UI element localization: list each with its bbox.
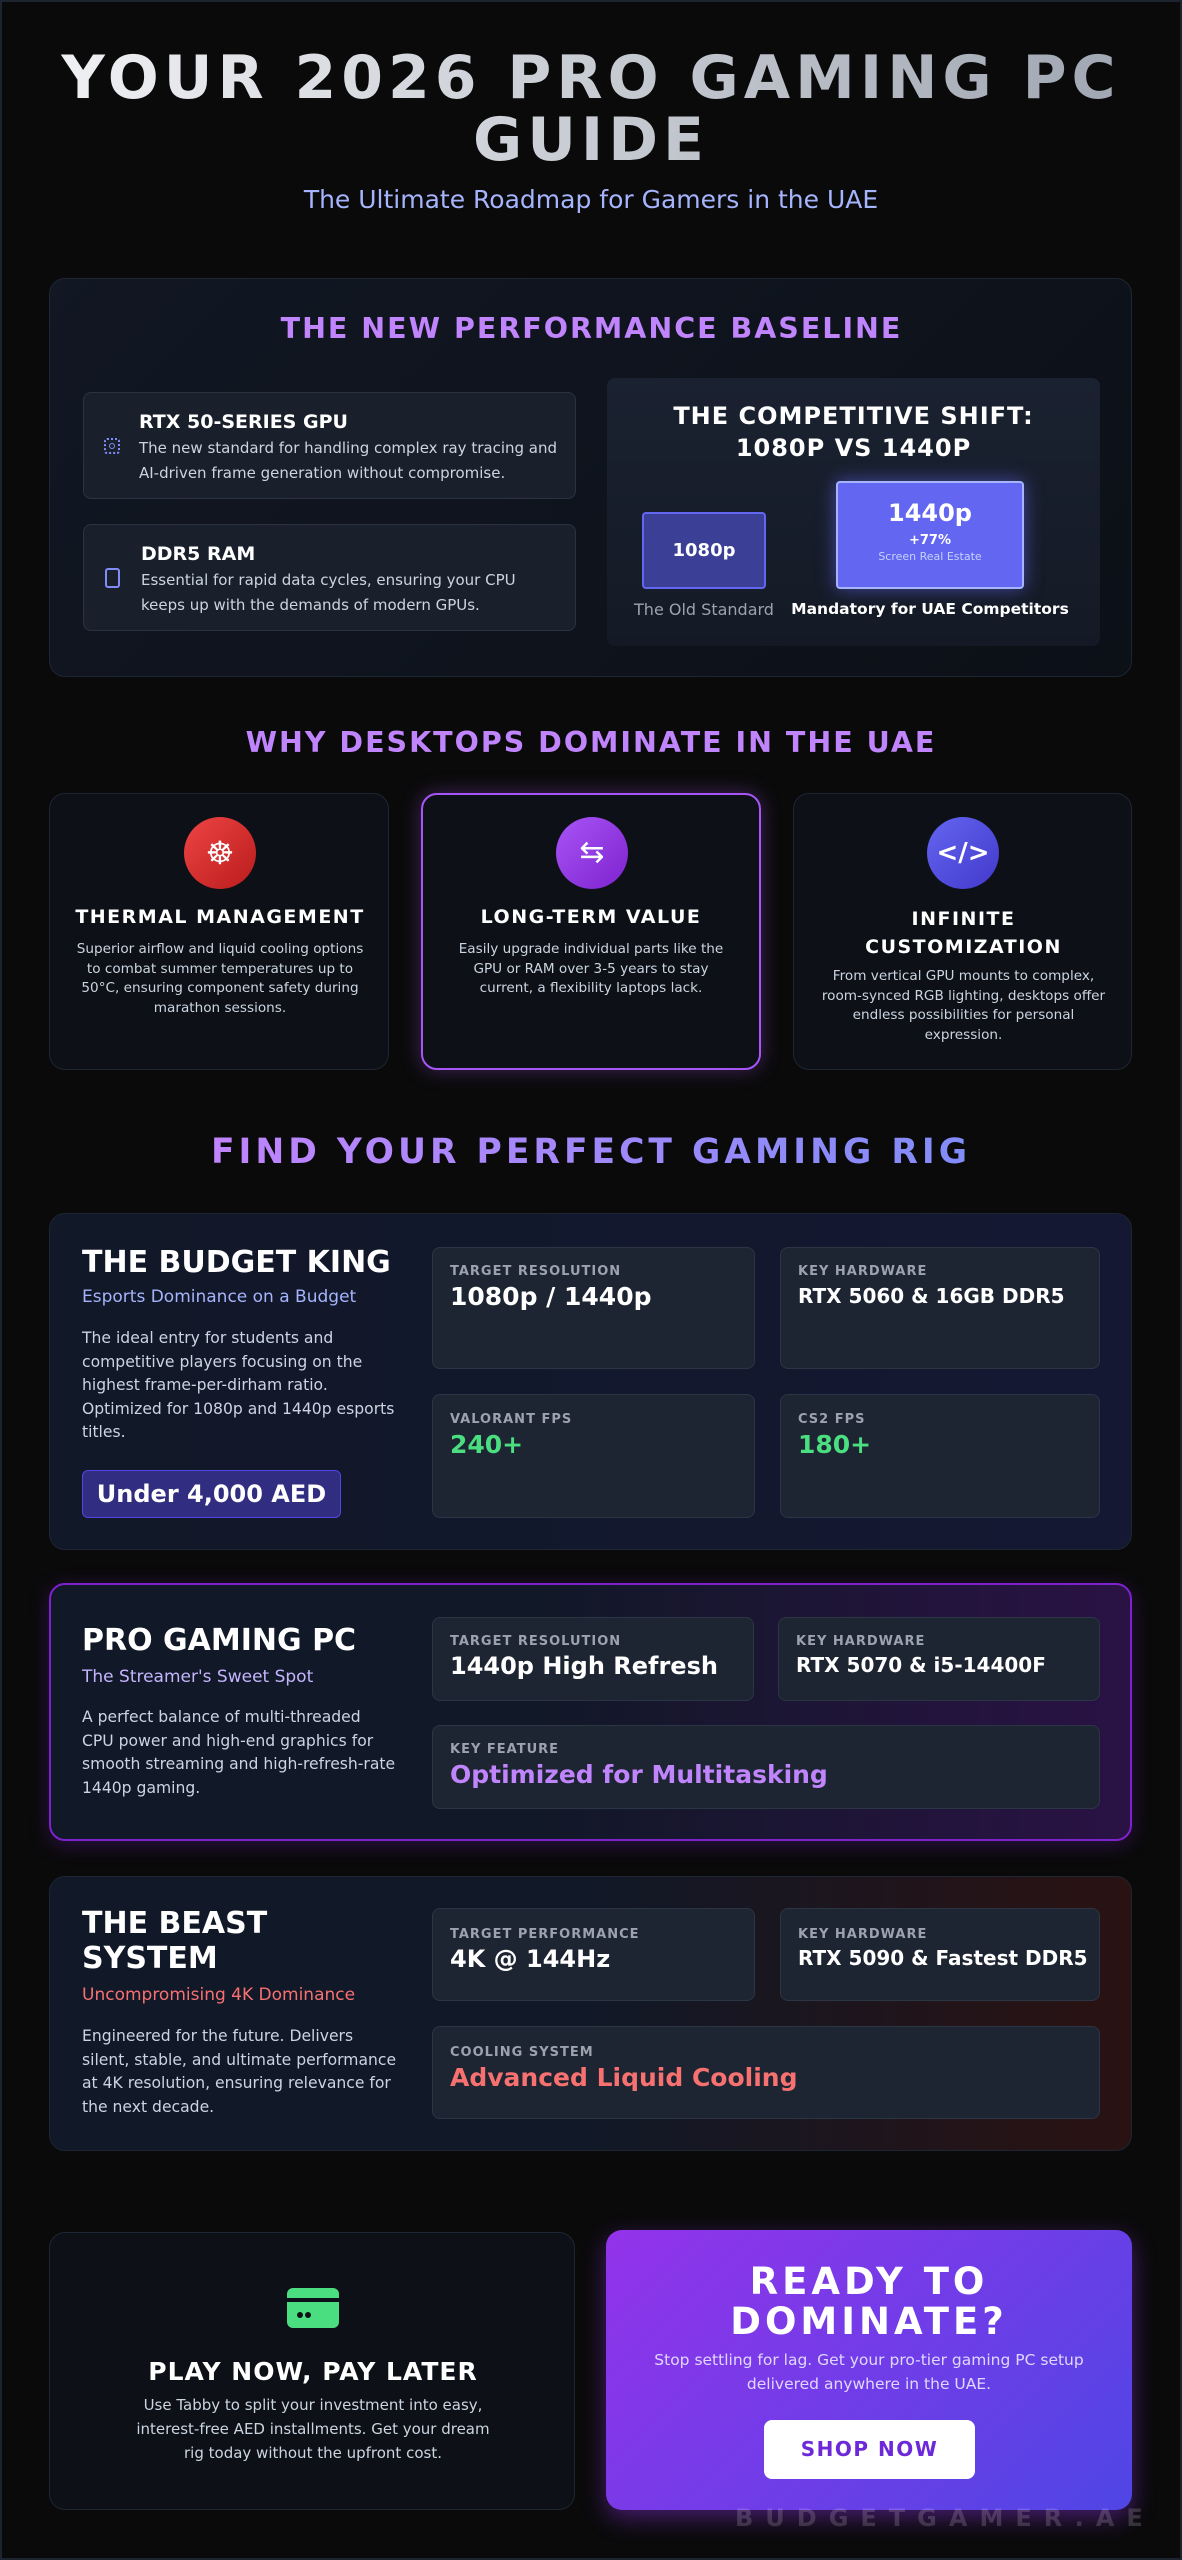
cell: cooling system bbox=[432, 2026, 1100, 2119]
cell: key hardware: KEY HARDWARE bbox=[798, 1264, 927, 1279]
panel: long-term value: Easily upgrade individual parts like the GPU or RAM over 3-5 years to stay current, a flexibility laptops lack. bbox=[459, 941, 723, 996]
title: GUIDE bbox=[473, 105, 709, 175]
subtitle: The Ultimate Roadmap for Gamers in the UAE bbox=[304, 185, 878, 214]
chart: competitive shift: 1080P VS 1440P bbox=[736, 434, 971, 462]
cell: target resolution bbox=[432, 1617, 754, 1701]
panel: beast system bbox=[49, 1876, 1132, 2151]
cell: valorant fps: 240+ bbox=[450, 1430, 523, 1459]
cell: key hardware bbox=[780, 1247, 1100, 1369]
panel: long-term value: LONG-TERM VALUE bbox=[481, 906, 701, 928]
panel: beast system: Engineered for the future. Delivers silent, stable, and ultimate performance at 4K resolution, ensuring relevance for the next decade. bbox=[82, 2027, 396, 2116]
panel: thermal management bbox=[49, 793, 389, 1070]
panel: pro gaming pc bbox=[49, 1583, 1132, 1841]
panel: thermal management: Superior airflow and liquid cooling options to combat summer temperatures up to 50°C, ensuring component safety during marathon sessions. bbox=[77, 941, 363, 1016]
card: RTX GPU: The new standard for handling complex ray tracing and AI-driven frame generation without compromise. bbox=[139, 439, 557, 482]
panel: beast system: THE BEAST bbox=[82, 1906, 267, 1941]
cell: target performance bbox=[432, 1908, 755, 2001]
cell: key hardware: KEY HARDWARE bbox=[796, 1634, 925, 1649]
panel: infinite customization: CUSTOMIZATION bbox=[865, 936, 1062, 958]
icon: thermal bbox=[184, 817, 256, 889]
panel: call to action bbox=[606, 2230, 1132, 2510]
button: shop now bbox=[764, 2420, 975, 2479]
icon: thermal: ☸ bbox=[206, 834, 234, 872]
cell: target resolution: TARGET RESOLUTION bbox=[450, 1264, 621, 1279]
bar: 1080p bbox=[642, 512, 766, 589]
icon: code bbox=[927, 817, 999, 889]
panel: play now pay later: PLAY NOW, PAY LATER bbox=[148, 2357, 478, 2386]
panel: beast system: Uncompromising 4K Dominance bbox=[82, 1985, 355, 2005]
cell: key hardware: RTX 5060 & 16GB DDR5 bbox=[798, 1284, 1065, 1308]
icon: chip bbox=[104, 438, 120, 454]
watermark: BUDGETGAMER.AE bbox=[735, 2504, 1155, 2532]
panel: budget king: Esports Dominance on a Budget bbox=[82, 1287, 356, 1307]
cell: cs2 fps bbox=[780, 1394, 1100, 1518]
icon: code: </> bbox=[936, 838, 990, 868]
bar: 1440p: +77% bbox=[909, 533, 951, 548]
panel: pro gaming pc: CPU power and high-end graphics for bbox=[82, 1732, 373, 1750]
panel: budget king: The ideal entry for students and competitive players focusing on the highest frame-per-dirham ratio. Optimized for 1080p and 1440p esports titles. bbox=[82, 1329, 394, 1441]
card: DDR5 RAM: DDR5 RAM bbox=[141, 543, 255, 565]
panel: performance baseline bbox=[49, 278, 1132, 677]
icon: upgrade: ⇆ bbox=[579, 835, 605, 870]
cell: cs2 fps: 180+ bbox=[798, 1430, 871, 1459]
heading: new performance baseline: THE NEW PERFORMANCE BASELINE bbox=[281, 312, 902, 345]
panel: beast system: SYSTEM bbox=[82, 1941, 218, 1976]
icon: ram bbox=[105, 568, 120, 588]
panel: infinite customization: INFINITE bbox=[912, 908, 1015, 930]
cell: target resolution bbox=[432, 1247, 755, 1369]
cell: key hardware: RTX 5090 & Fastest DDR5 bbox=[798, 1946, 1088, 1970]
cell: key feature: KEY FEATURE bbox=[450, 1742, 559, 1757]
panel: pro gaming pc: The Streamer's Sweet Spot bbox=[82, 1667, 313, 1687]
panel: long-term value bbox=[421, 793, 761, 1070]
icon: card bbox=[287, 2288, 339, 2328]
panel: play now pay later bbox=[49, 2232, 575, 2510]
button: shop now: SHOP NOW bbox=[801, 2437, 938, 2461]
card: DDR5 RAM bbox=[83, 524, 576, 631]
cell: cs2 fps: CS2 FPS bbox=[798, 1412, 866, 1427]
cell: key feature: Optimized for Multitasking bbox=[450, 1760, 828, 1789]
cell: key feature bbox=[432, 1725, 1100, 1809]
chart: competitive shift: Mandatory for UAE Competitors bbox=[791, 600, 1069, 618]
panel: play now pay later: Use Tabby to split your investment into easy, interest-free AED installments. Get your dream rig today without the upfront cost. bbox=[136, 2396, 490, 2462]
chart: competitive shift bbox=[607, 378, 1100, 646]
panel: pro gaming pc: smooth streaming and high-refresh-rate bbox=[82, 1755, 395, 1773]
panel: budget king: THE BUDGET KING bbox=[82, 1245, 391, 1280]
bar: 1440p: Screen Real Estate bbox=[878, 550, 982, 563]
card: RTX GPU bbox=[83, 392, 576, 499]
cell: key hardware bbox=[780, 1908, 1100, 2001]
cell: target performance: TARGET PERFORMANCE bbox=[450, 1927, 640, 1942]
cell: target resolution: TARGET RESOLUTION bbox=[450, 1634, 621, 1649]
bar: 1440p bbox=[836, 481, 1024, 589]
cell: target resolution: 1080p / 1440p bbox=[450, 1282, 652, 1311]
panel: infinite customization: From vertical GPU mounts to complex, room-synced RGB lighting, desktops offer endless possibilities for personal expression. bbox=[822, 968, 1105, 1042]
cell: target performance: 4K @ 144Hz bbox=[450, 1945, 610, 1973]
title: YOUR 2026 PRO GAMING PC bbox=[61, 43, 1121, 113]
panel: pro gaming pc: 1440p gaming. bbox=[82, 1778, 200, 1796]
panel: call to action: READY TO bbox=[750, 2260, 988, 2303]
card: DDR5 RAM: Essential for rapid data cycles, ensuring your CPU keeps up with the demands of modern GPUs. bbox=[141, 571, 516, 614]
icon: upgrade bbox=[556, 817, 628, 889]
cell: key hardware bbox=[778, 1617, 1100, 1701]
title bbox=[0, 47, 1182, 171]
price badge: Under 4,000 AED bbox=[97, 1480, 326, 1508]
heading: find your perfect rig: FIND YOUR PERFECT GAMING RIG bbox=[211, 1132, 971, 1172]
panel: infinite customization bbox=[793, 793, 1132, 1070]
card: RTX GPU: RTX 50-SERIES GPU bbox=[139, 411, 348, 433]
bar: 1440p: 1440p bbox=[888, 499, 972, 527]
cell: cooling system: COOLING SYSTEM bbox=[450, 2045, 594, 2060]
cell: cooling system: Advanced Liquid Cooling bbox=[450, 2063, 797, 2092]
panel: call to action: DOMINATE? bbox=[730, 2300, 1008, 2343]
cell: valorant fps bbox=[432, 1394, 755, 1518]
cell: key hardware: KEY HARDWARE bbox=[798, 1927, 927, 1942]
panel: budget king bbox=[49, 1213, 1132, 1550]
panel: thermal management: THERMAL MANAGEMENT bbox=[75, 906, 365, 928]
cell: key hardware: RTX 5070 & i5-14400F bbox=[796, 1653, 1046, 1677]
cell: valorant fps: VALORANT FPS bbox=[450, 1412, 572, 1427]
chart: competitive shift: THE COMPETITIVE SHIFT: bbox=[673, 402, 1034, 430]
cell: target resolution: 1440p High Refresh bbox=[450, 1652, 718, 1680]
bar: 1080p: 1080p bbox=[672, 540, 735, 561]
price badge bbox=[82, 1470, 341, 1518]
panel: call to action: Stop settling for lag. Get your pro-tier gaming PC setup delivered anywhere in the UAE. bbox=[654, 2351, 1084, 2393]
panel: pro gaming pc: A perfect balance of multi-threaded bbox=[82, 1708, 361, 1726]
heading: why desktops dominate: WHY DESKTOPS DOMINATE IN THE UAE bbox=[246, 726, 936, 759]
panel: pro gaming pc: PRO GAMING PC bbox=[82, 1623, 356, 1658]
chart: competitive shift: The Old Standard bbox=[634, 600, 774, 619]
